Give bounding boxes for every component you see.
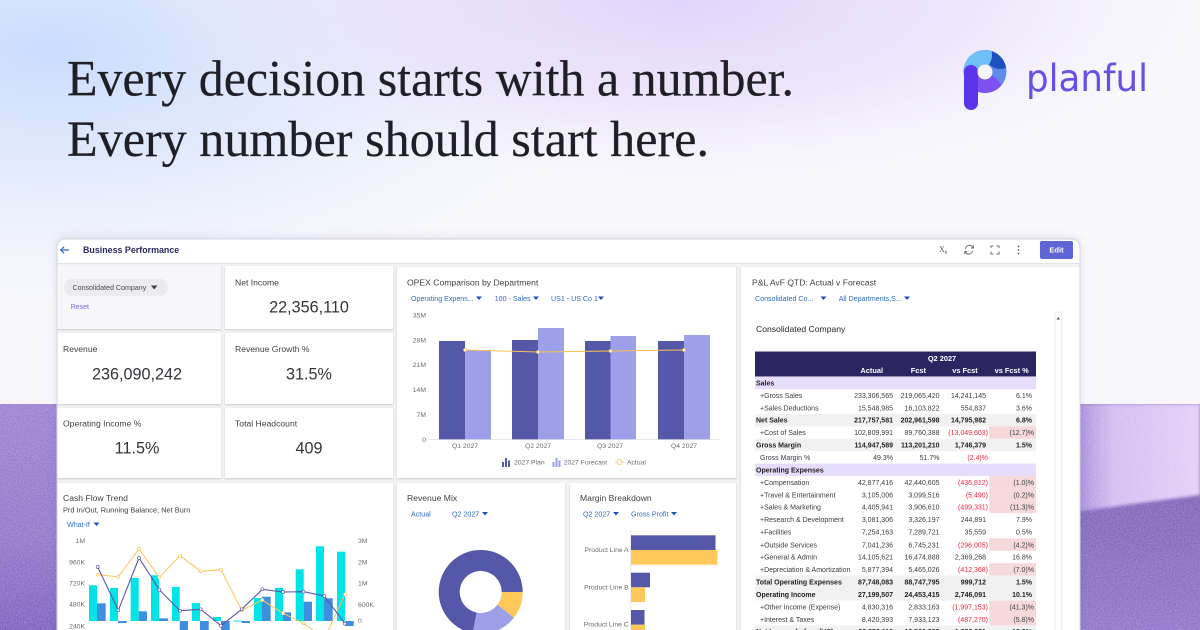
- panel: revenue: 236,090,242: [92, 366, 182, 384]
- row: depreciation: (412,368): [958, 567, 988, 574]
- row: cost of sales: [760, 426, 1036, 439]
- row: facilities: +Facilities: [760, 530, 792, 537]
- filters: All Departments,S...: [839, 295, 902, 303]
- yellow line: [96, 548, 346, 630]
- row: operating income: 24,453,415: [904, 592, 940, 599]
- panel: cash flow trend: Prd In/Out, Running Balance, Net Burn: [63, 506, 190, 514]
- section: sales: [755, 377, 1036, 389]
- filters: Operating Expens...: [411, 295, 474, 303]
- legend: [502, 458, 646, 467]
- row: outside services: (4.2)%: [1013, 542, 1034, 549]
- edit button: Edit: [1049, 246, 1064, 254]
- row: sales and marketing: +Sales & Marketing: [760, 505, 821, 512]
- icon: variable: X: [939, 245, 945, 254]
- row: total operating expenses: 87,748,083: [858, 580, 893, 586]
- filters: [755, 296, 910, 302]
- row: net sales: 14,795,982: [951, 418, 986, 425]
- row: gross sales: [760, 393, 1032, 400]
- row: sales deductions: 15,548,985: [858, 405, 893, 412]
- right axis: 600K: [358, 602, 374, 609]
- row: outside services: +Outside Services: [760, 542, 817, 549]
- panel: revenue: Revenue: [63, 344, 98, 354]
- row: sales deductions: 3.6%: [1016, 405, 1032, 412]
- purple line: [96, 556, 346, 627]
- row: operating income: 27,199,507: [858, 592, 893, 599]
- right axis: 2M: [358, 560, 368, 566]
- right axis: 1M: [358, 580, 368, 588]
- row: interest and taxes: 7,933,123: [908, 617, 940, 624]
- panel: total headcount: Total Headcount: [235, 418, 298, 428]
- row: net sales: Net Sales: [756, 418, 788, 425]
- row: research: [760, 517, 1032, 524]
- panel: revenue mix: Revenue Mix: [407, 493, 458, 503]
- row: cost of sales: (13,049,603): [948, 430, 988, 437]
- panel: operating income: Operating Income %: [63, 418, 142, 428]
- filters: Consolidated Co...: [755, 295, 813, 303]
- left axis: 480K: [69, 602, 85, 608]
- purple textured band: [0, 400, 1200, 630]
- row: gross sales: 219,065,420: [901, 393, 940, 400]
- table header: Fcst: [911, 366, 927, 375]
- section: operating expenses: [755, 464, 1036, 476]
- icon: refresh: [965, 245, 974, 254]
- panel: company filter: Consolidated Company: [72, 284, 147, 292]
- section: sales: Sales: [756, 380, 774, 388]
- row: interest and taxes: [760, 613, 1036, 625]
- row: general and admin: 16,474,888: [904, 555, 940, 562]
- panel: revenue growth: Revenue Growth %: [235, 344, 310, 354]
- row: research: 3,326,197: [908, 517, 940, 524]
- window shadow: [57, 239, 1080, 630]
- row: cost of sales: 102,809,991: [854, 430, 893, 437]
- table header: vs Fcst %: [995, 366, 1029, 375]
- legend: 2027 Forecast: [564, 460, 607, 466]
- panel: revenue mix: Q2 2027: [452, 510, 479, 518]
- row: compensation: (436,812): [958, 480, 988, 487]
- row: sales deductions: +Sales Deductions: [760, 405, 819, 412]
- row: operating income: [755, 588, 1036, 600]
- panel: net income: 22,356,110: [269, 298, 349, 316]
- panel: revenue mix: [397, 483, 565, 630]
- bar chart: 14M: [413, 387, 426, 394]
- icon: more menu: [1018, 246, 1019, 254]
- panel: OPEX comparison: [397, 267, 736, 478]
- row: research: 3,081,306: [862, 517, 893, 524]
- teal bars: [89, 546, 345, 622]
- panel: revenue growth: [225, 333, 393, 404]
- panel: margin breakdown: Q2 2027: [583, 510, 610, 518]
- row: travel: (5,490): [966, 492, 988, 499]
- row: operating income: 2,746,091: [955, 592, 986, 599]
- legend: Actual: [627, 460, 646, 466]
- row: depreciation: 5,877,394: [862, 567, 893, 574]
- row: gross sales: +Gross Sales: [760, 393, 803, 400]
- icon: variable: 8: [945, 251, 948, 256]
- icon: planful P mark: [964, 50, 1006, 110]
- row: gross margin: 113,201,210: [901, 443, 940, 450]
- horizontal bar chart: Product Line B: [584, 584, 629, 592]
- row: net sales: [755, 414, 1036, 426]
- bar chart: Q2 2027: [525, 443, 551, 450]
- panel: net income: Net Income: [235, 278, 279, 288]
- row: depreciation: 5,465,026: [908, 567, 940, 574]
- panel: company filter: Reset: [71, 304, 89, 311]
- row: compensation: (1.0)%: [1013, 480, 1034, 487]
- logo: planful: [964, 50, 1145, 110]
- row: sales deductions: 16,103,822: [904, 405, 940, 412]
- row: other income: +Other Income (Expense): [760, 604, 840, 612]
- row: gross sales: 6.1%: [1016, 393, 1032, 400]
- row: gross sales: 233,306,565: [854, 393, 893, 400]
- panel: cash flow trend: What-If: [67, 521, 90, 529]
- filters: [411, 296, 604, 302]
- row: facilities: 7,289,721: [908, 530, 940, 537]
- row: compensation: [760, 476, 1036, 488]
- row: outside services: [760, 538, 1036, 551]
- horizontal bar chart: Product Line C: [584, 622, 629, 628]
- row: sales deductions: [760, 405, 1032, 412]
- row: operating income: 10.1%: [1012, 592, 1033, 599]
- bar chart: 21M: [413, 362, 426, 369]
- left axis: 1M: [76, 538, 85, 545]
- row: compensation: +Compensation: [760, 480, 809, 487]
- bar chart: Q4 2027: [671, 443, 697, 450]
- row: travel: +Travel & Entertainment: [760, 492, 835, 499]
- row: net income (clipped): [755, 625, 1036, 630]
- row: cost of sales: (12.7)%: [1009, 430, 1034, 437]
- table caption: Consolidated Company: [756, 324, 846, 334]
- row: operating income: Operating Income: [756, 592, 816, 599]
- row: facilities: 0.5%: [1016, 530, 1032, 537]
- icon: back arrow: [61, 247, 69, 253]
- left axis: 960K: [69, 560, 85, 566]
- row: sales and marketing: 4,405,941: [862, 505, 893, 512]
- row: facilities: 7,254,163: [862, 530, 893, 537]
- left axis: [69, 538, 85, 630]
- panel: revenue mix: Actual: [411, 510, 431, 518]
- right axis: 0: [358, 618, 362, 625]
- row: total operating expenses: [755, 576, 1036, 588]
- row: compensation: 42,877,416: [858, 480, 893, 487]
- row: gross margin percent: (2.4)%: [967, 455, 988, 462]
- row: other income: [760, 601, 1036, 613]
- row: general and admin: 16.8%: [1012, 555, 1032, 562]
- row: gross margin: [755, 439, 1036, 451]
- row: research: 7.9%: [1016, 517, 1032, 524]
- section: operating expenses: Operating Expenses: [756, 467, 824, 474]
- row: research: 244,891: [961, 517, 986, 524]
- icon: fullscreen: [991, 246, 999, 254]
- panel: margin breakdown: Margin Breakdown: [580, 493, 652, 503]
- row: net sales: 6.8%: [1016, 418, 1033, 425]
- row: gross margin: 114,947,589: [854, 443, 893, 450]
- window outline: [57, 239, 1080, 630]
- panel: total headcount: [225, 408, 393, 478]
- panel: P&L table: P&L AvF QTD: Actual v Forecast: [752, 278, 877, 288]
- window header bar: [57, 239, 1080, 264]
- row: cost of sales: +Cost of Sales: [760, 430, 806, 437]
- row: other income: 2,833,163: [908, 604, 940, 612]
- wordmark: planful: [1026, 57, 1148, 100]
- row: general and admin: 2,369,268: [955, 555, 986, 562]
- page title: Business Performance: [83, 245, 179, 255]
- row: gross margin: 1,746,379: [955, 443, 986, 450]
- row: depreciation: (7.0)%: [1013, 567, 1034, 574]
- panel: operating income: [57, 408, 221, 478]
- row: general and admin: 14,105,621: [858, 555, 893, 562]
- right axis: 3M: [358, 538, 368, 545]
- table header: Q2 2027: [928, 354, 956, 363]
- panel: operating income: 11.5%: [115, 440, 159, 458]
- panel: cash flow trend: Cash Flow Trend: [63, 493, 128, 503]
- row: compensation: 42,440,605: [904, 480, 940, 487]
- bar chart: 28M: [413, 338, 426, 344]
- row: interest and taxes: (487,270): [958, 617, 988, 624]
- panel: OPEX comparison: OPEX Comparison by Department: [407, 278, 539, 288]
- row: depreciation: +Depreciation & Amortization: [760, 567, 851, 574]
- blue bars: [97, 597, 354, 630]
- row: gross margin: Gross Margin: [756, 443, 801, 450]
- legend: 2027 Plan: [514, 460, 545, 466]
- bar chart: 7M: [417, 412, 426, 419]
- row: other income: (1,997,153): [952, 604, 988, 612]
- row: other income: (41.3)%: [1009, 604, 1034, 612]
- row: gross margin percent: 49.3%: [873, 455, 893, 462]
- row: travel: 3,099,516: [908, 492, 940, 499]
- row: sales and marketing: (11.3)%: [1010, 505, 1034, 512]
- panel: revenue: [57, 333, 221, 404]
- horizontal bar chart: [584, 530, 717, 630]
- filters: US1 - US Co 1: [551, 295, 598, 303]
- row: sales and marketing: (499,331): [958, 505, 988, 512]
- bar chart: 35M: [413, 312, 426, 320]
- row: gross margin: 1.5%: [1016, 443, 1033, 450]
- row: gross margin percent: 51.7%: [920, 455, 940, 462]
- row: gross sales: 14,241,145: [951, 393, 986, 400]
- bar chart: 0: [422, 437, 426, 444]
- row: travel: [760, 488, 1036, 501]
- panel: total headcount: 409: [295, 440, 323, 458]
- row: outside services: 7,041,236: [862, 542, 893, 549]
- dashboard window: [57, 239, 1080, 630]
- row: interest and taxes: +Interest & Taxes: [760, 617, 815, 624]
- row: cost of sales: 89,760,388: [904, 430, 940, 437]
- panel: margin breakdown: [570, 483, 736, 630]
- horizontal bar chart: Product Line A: [584, 547, 629, 554]
- bar chart: Q3 2027: [597, 443, 623, 450]
- row: total operating expenses: 1.5%: [1016, 580, 1033, 586]
- row: net sales: 202,961,598: [901, 418, 940, 425]
- table: [755, 352, 1036, 630]
- headline: Every decision starts with a number.: [67, 52, 794, 108]
- headline: Every number should start here.: [67, 112, 709, 168]
- row: sales and marketing: 3,906,610: [908, 505, 940, 512]
- row: research: +Research & Development: [760, 517, 844, 524]
- row: outside services: 6,745,231: [908, 542, 940, 549]
- row: gross margin percent: [760, 455, 988, 462]
- row: net sales: 217,757,581: [854, 418, 893, 425]
- row: sales deductions: 554,837: [961, 405, 986, 412]
- panel: cash flow trend: [57, 483, 393, 630]
- row: gross margin percent: Gross Margin %: [760, 455, 810, 462]
- row: facilities: 35,559: [965, 530, 986, 537]
- panel: net income: [225, 266, 393, 329]
- scrollbar: [1055, 312, 1062, 630]
- row: outside services: (296,005): [958, 542, 988, 549]
- row: other income: 4,830,316: [862, 604, 893, 612]
- right axis: [358, 538, 374, 625]
- donut chart: [439, 550, 523, 630]
- panel: revenue growth: 31.5%: [286, 366, 332, 384]
- panel: company filter: [57, 266, 221, 329]
- panel: P&L table: [741, 267, 1080, 630]
- row: depreciation: [760, 563, 1036, 576]
- row: interest and taxes: (5.8)%: [1013, 617, 1034, 624]
- headline: [67, 52, 794, 168]
- row: total operating expenses: 999,712: [961, 580, 986, 586]
- left axis: 720K: [69, 580, 85, 588]
- panel: margin breakdown: Gross Profit: [631, 510, 668, 518]
- row: interest and taxes: 8,420,393: [862, 617, 893, 624]
- edit button: [1040, 241, 1073, 259]
- row: travel: 3,105,006: [862, 492, 893, 499]
- row: general and admin: [760, 555, 1032, 562]
- table header: vs Fcst: [952, 366, 978, 375]
- row: facilities: [760, 530, 1032, 537]
- bar chart: [413, 312, 720, 450]
- filters: 100 - Sales: [495, 295, 531, 303]
- row: sales and marketing: [760, 501, 1036, 513]
- row: total operating expenses: 88,747,795: [904, 580, 940, 586]
- table header: Actual: [860, 366, 883, 375]
- row: total operating expenses: Total Operating Expenses: [756, 580, 842, 586]
- row: general and admin: +General & Admin: [760, 555, 817, 562]
- bar chart: Q1 2027: [452, 443, 478, 450]
- row: travel: (0.2)%: [1013, 492, 1034, 499]
- table header: [755, 352, 1036, 376]
